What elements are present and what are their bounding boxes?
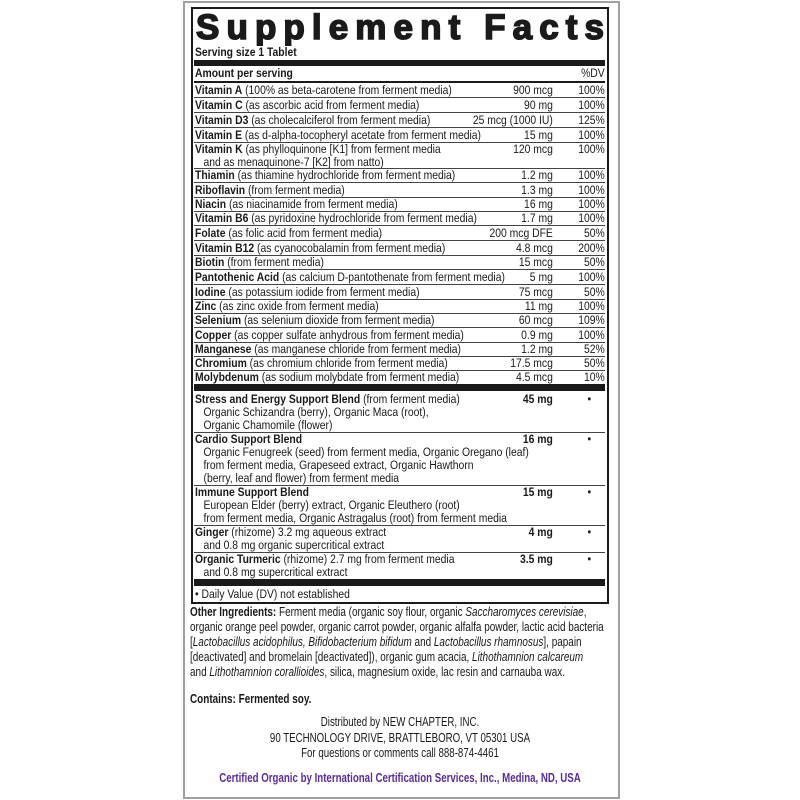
text: 60 mcg — [519, 313, 553, 327]
text: 3.5 mg — [520, 552, 553, 566]
nutrient rows — [195, 83, 605, 97]
other ingredients text: organic orange peel powder, organic carrot powder, organic alfalfa powder, lactic acid bacteria — [190, 620, 604, 634]
other ingredients text: and Lithothamnion corallioides, silica, magnesium oxide, lac resin and carnauba wax. — [190, 665, 565, 679]
text: 4.5 mcg — [516, 370, 553, 384]
text: 50% — [584, 356, 605, 370]
title: Supplement Facts — [196, 8, 604, 46]
text: Organic Turmeric (rhizome) 2.7 mg from ferment media — [195, 552, 454, 566]
text: from ferment media, Organic Astragalus (root) from ferment media — [204, 511, 507, 525]
blend rows: 45 mg — [523, 392, 553, 406]
text: (berry, leaf and flower) from ferment media — [204, 471, 399, 485]
text: Chromium (as chromium chloride from ferment media) — [195, 356, 448, 370]
text: 100% — [578, 270, 605, 284]
text: Copper (as copper sulfate anhydrous from ferment media) — [195, 328, 464, 342]
text: 1.3 mg — [521, 183, 553, 197]
text: Pantothenic Acid (as calcium D-pantothenate from ferment media) — [195, 270, 505, 284]
text: 50% — [584, 285, 605, 299]
text: Ginger (rhizome) 3.2 mg aqueous extract — [195, 525, 386, 539]
text: 100% — [578, 197, 605, 211]
text: and 0.8 mg organic supercritical extract — [204, 538, 384, 552]
text: Vitamin C (as ascorbic acid from ferment media) — [195, 98, 419, 112]
text: Cardio Support Blend — [195, 432, 302, 446]
text: 11 mg — [525, 299, 553, 313]
header row: %DV — [581, 66, 605, 80]
text: 125% — [578, 113, 605, 127]
text: Thiamin (as thiamine hydrochloride from ferment media) — [195, 168, 455, 182]
other ingredients text — [190, 605, 604, 679]
text: • — [587, 525, 591, 539]
text: Riboflavin (from ferment media) — [195, 183, 345, 197]
text: 10% — [584, 370, 605, 384]
distributor info: 90 TECHNOLOGY DRIVE, BRATTLEBORO, VT 05301 USA — [270, 730, 530, 744]
text: Vitamin D3 (as cholecalciferol from ferment media) — [195, 113, 430, 127]
text: 25 mcg (1000 IU) — [473, 113, 553, 127]
distributor info — [270, 715, 530, 760]
other ingredients text: Other Ingredients: Ferment media (organic soy flour, organic Saccharomyces cerevisiae, — [190, 605, 586, 619]
distributor info: Distributed by NEW CHAPTER, INC. — [321, 715, 479, 729]
text: 109% — [578, 313, 605, 327]
text: Manganese (as manganese chloride from ferment media) — [195, 342, 461, 356]
text: Selenium (as selenium dioxide from ferment media) — [195, 313, 435, 327]
text: 15 mcg — [519, 255, 553, 269]
text: 100% — [578, 128, 605, 142]
text: 100% — [578, 98, 605, 112]
text: Biotin (from ferment media) — [195, 255, 324, 269]
text: Vitamin E (as d-alpha-tocopheryl acetate from ferment media) — [195, 128, 481, 142]
nutrient rows: 900 mcg — [513, 83, 553, 97]
text: 50% — [584, 226, 605, 240]
blend rows: Stress and Energy Support Blend (from ferment media) — [195, 392, 460, 406]
text: 100% — [578, 299, 605, 313]
text: from ferment media, Grapeseed extract, Organic Hawthorn — [204, 458, 474, 472]
text: 52% — [584, 342, 605, 356]
other ingredients text: [Lactobacillus acidophilus, Bifidobacterium bifidum and Lactobacillus rhamnosus], papain — [190, 635, 582, 649]
text: 120 mcg — [513, 142, 553, 156]
text: Vitamin B12 (as cyanocobalamin from ferment media) — [195, 241, 445, 255]
text: 16 mg — [523, 432, 553, 446]
contains statement: Contains: Fermented soy. — [190, 692, 311, 706]
serving size: Serving size 1 Tablet — [195, 45, 297, 59]
text: 0.9 mg — [521, 328, 553, 342]
blend rows: Organic Chamomile (flower) — [204, 418, 332, 432]
text: 16 mg — [524, 197, 553, 211]
text: Zinc (as zinc oxide from ferment media) — [195, 299, 379, 313]
text: Vitamin B6 (as pyridoxine hydrochloride from ferment media) — [195, 211, 477, 225]
text: • — [587, 485, 591, 499]
text: Organic Fenugreek (seed) from ferment media, Organic Oregano (leaf) — [204, 445, 529, 459]
text: 1.2 mg — [521, 168, 553, 182]
panel: supplement facts box — [191, 7, 609, 604]
text: 50% — [584, 255, 605, 269]
text: 100% — [578, 183, 605, 197]
text: Immune Support Blend — [195, 485, 309, 499]
text: 90 mg — [524, 98, 553, 112]
blend rows — [195, 392, 591, 432]
text: Vitamin K (as phylloquinone [K1] from ferment media — [195, 142, 441, 156]
text: Iodine (as potassium iodide from ferment media) — [195, 285, 420, 299]
text: 1.7 mg — [521, 211, 553, 225]
certification: Certified Organic by International Certification Services, Inc., Medina, ND, USA — [219, 771, 581, 785]
header row: Amount per serving — [195, 66, 293, 80]
text: • — [587, 552, 591, 566]
text: 15 mg — [523, 485, 553, 499]
footnote: • Daily Value (DV) not established — [195, 587, 350, 601]
text: 4.8 mcg — [516, 241, 553, 255]
text: Molybdenum (as sodium molybdate from ferment media) — [195, 370, 459, 384]
text: 100% — [578, 168, 605, 182]
text: 100% — [578, 328, 605, 342]
header row — [195, 66, 605, 80]
text: 5 mg — [530, 270, 553, 284]
text: 75 mcg — [519, 285, 553, 299]
text: 17.5 mcg — [510, 356, 553, 370]
other ingredients text: [deactivated] and bromelain [deactivated]), organic gum acacia, Lithothamnion calcareum — [190, 650, 583, 664]
text: and 0.8 mg supercritical extract — [204, 565, 347, 579]
text: 100% — [578, 142, 605, 156]
text: Niacin (as niacinamide from ferment media) — [195, 197, 398, 211]
text: 4 mg — [529, 525, 553, 539]
nutrient rows: 100% — [578, 83, 605, 97]
text: European Elder (berry) extract, Organic Eleuthero (root) — [204, 498, 460, 512]
text: 1.2 mg — [521, 342, 553, 356]
text: 200% — [578, 241, 605, 255]
text: Folate (as folic acid from ferment media) — [195, 226, 382, 240]
blend rows: Organic Schizandra (berry), Organic Maca (root), — [204, 405, 429, 419]
text: 100% — [578, 211, 605, 225]
nutrient rows: Vitamin A (100% as beta-carotene from ferment media) — [195, 83, 452, 97]
text: and as menaquinone-7 [K2] from natto) — [204, 155, 384, 169]
text: 15 mg — [524, 128, 553, 142]
text: • — [587, 432, 591, 446]
text: 200 mcg DFE — [490, 226, 553, 240]
distributor info: For questions or comments call 888-874-4461 — [301, 746, 499, 760]
blend rows: • — [587, 392, 591, 406]
